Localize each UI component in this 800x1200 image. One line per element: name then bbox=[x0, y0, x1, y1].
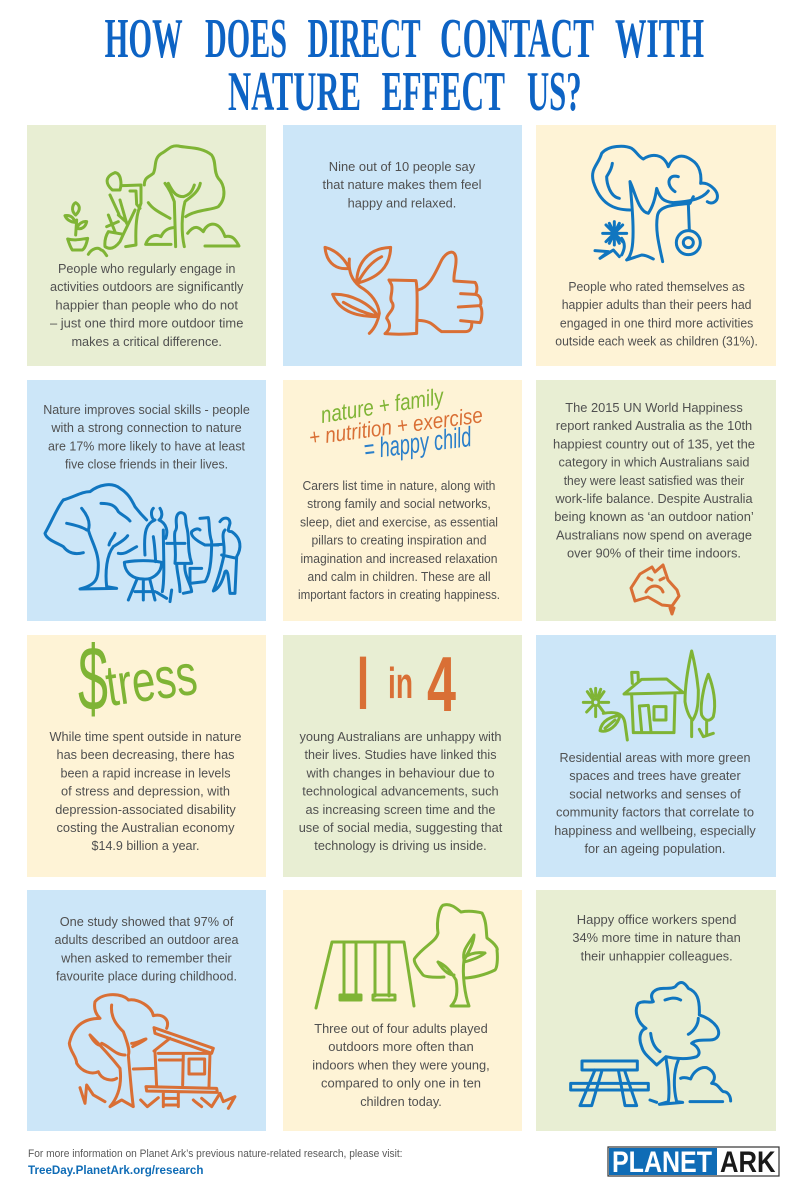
text block: Nature improves social skills - people bbox=[43, 402, 250, 417]
text block: happiest country out of 135, yet the bbox=[553, 436, 755, 451]
text block: One study showed that 97% of bbox=[60, 914, 234, 929]
text block: The 2015 UN World Happiness bbox=[565, 400, 743, 415]
text block: work-life balance. Despite Australia bbox=[555, 491, 753, 506]
text block: People who rated themselves as bbox=[568, 279, 745, 294]
text block: happy and relaxed. bbox=[348, 195, 456, 210]
text block: adults described an outdoor area bbox=[54, 932, 239, 947]
panel: favourite place bbox=[27, 890, 266, 1131]
text block: been a rapid increase in levels bbox=[60, 765, 231, 780]
text block: happiness and wellbeing, especially bbox=[554, 823, 756, 838]
text block: outdoors more often than bbox=[328, 1039, 474, 1054]
handwritten equation: = happy child bbox=[362, 421, 474, 465]
handwritten equation: nature + family bbox=[319, 383, 446, 428]
text block: Nine out of 10 people say bbox=[329, 159, 476, 174]
panel: stress bbox=[27, 628, 266, 877]
text block: imagination and increased relaxation bbox=[300, 551, 498, 566]
text block bbox=[50, 729, 242, 853]
text block: technology is driving us inside. bbox=[314, 838, 487, 853]
icon: gardener and tree bbox=[65, 146, 239, 256]
logo: Planet Ark: PLANET bbox=[612, 1146, 712, 1179]
text block: compared to only one in ten bbox=[321, 1076, 481, 1091]
text block: technological advancements, such bbox=[302, 784, 499, 799]
text block: has been decreasing, there has bbox=[56, 747, 235, 762]
icon: swing set and tree bbox=[316, 905, 497, 1008]
text block bbox=[554, 750, 756, 856]
panel: carers list bbox=[283, 380, 522, 621]
text block: community factors that correlate to bbox=[556, 805, 754, 820]
text block: as increasing screen time and the bbox=[306, 802, 496, 817]
panel: residential areas bbox=[536, 635, 776, 877]
text block: engaged in one third more activities bbox=[560, 315, 754, 330]
text block: $14.9 billion a year. bbox=[92, 838, 200, 853]
text block: when asked to remember their bbox=[60, 950, 232, 965]
text block bbox=[553, 400, 755, 561]
title: HOW bbox=[105, 8, 183, 70]
text block: and calm in children. These are all bbox=[308, 569, 491, 584]
text block: Carers list time in nature, along with bbox=[303, 478, 495, 493]
text block: People who regularly engage in bbox=[58, 261, 235, 276]
panel: happy and relaxed bbox=[283, 125, 522, 366]
title: NATURE bbox=[228, 61, 361, 123]
text block: their unhappier colleagues. bbox=[581, 948, 733, 963]
text block: of stress and depression, with bbox=[61, 784, 230, 799]
text block: favourite place during childhood. bbox=[56, 969, 237, 984]
panel: happier adults bbox=[536, 125, 776, 366]
title: DIRECT bbox=[308, 8, 421, 70]
text block: makes a critical difference. bbox=[71, 334, 222, 349]
heading: 1 in 4: I bbox=[357, 641, 369, 726]
panel: outdoor activities bbox=[27, 125, 266, 366]
icon: tree house bbox=[69, 995, 235, 1108]
text block bbox=[572, 912, 741, 963]
panel: social skills bbox=[27, 380, 266, 621]
logo: Planet Ark: ARK bbox=[720, 1146, 776, 1179]
text block: strong family and social networks, bbox=[307, 496, 491, 511]
panel: played outdoors bbox=[283, 890, 522, 1131]
title: WITH bbox=[615, 8, 704, 70]
title bbox=[105, 8, 704, 123]
text block: Three out of four adults played bbox=[314, 1021, 488, 1036]
panel: world happiness report bbox=[536, 380, 776, 621]
icon: barbecue with friends under tree bbox=[45, 485, 240, 602]
handwritten equation bbox=[307, 383, 484, 465]
text block: with changes in behaviour due to bbox=[306, 765, 494, 780]
text block: While time spent outside in nature bbox=[50, 729, 242, 744]
text block: that nature makes them feel bbox=[322, 177, 482, 192]
text block: depression-associated disability bbox=[55, 802, 236, 817]
text block bbox=[298, 478, 500, 602]
text block bbox=[312, 1021, 490, 1109]
title: CONTACT bbox=[440, 8, 594, 70]
text block: important factors in creating happiness. bbox=[298, 587, 500, 602]
text block: over 90% of their time indoors. bbox=[567, 546, 741, 561]
text block: – just one third more outdoor time bbox=[50, 316, 243, 331]
heading: $tress bbox=[78, 628, 201, 730]
icon: plant and thumbs up bbox=[325, 247, 482, 334]
text block bbox=[54, 914, 239, 984]
text block bbox=[50, 261, 244, 349]
heading: 1 in 4: in bbox=[388, 659, 413, 708]
footer link: TreeDay.PlanetArk.org/research bbox=[28, 1165, 204, 1177]
text block: with a strong connection to nature bbox=[50, 420, 242, 435]
text block: children today. bbox=[360, 1094, 442, 1109]
text block: Residential areas with more green bbox=[560, 750, 750, 765]
handwritten equation: + nutrition + exercise bbox=[307, 402, 484, 450]
text block: outside each week as children (31%). bbox=[555, 334, 758, 349]
text block bbox=[322, 159, 482, 210]
heading: $tress: tress bbox=[102, 642, 201, 719]
icon: tree with tyre swing bbox=[593, 146, 717, 262]
panel: 1 in 4 bbox=[283, 635, 522, 877]
text block: five close friends in their lives. bbox=[65, 457, 228, 472]
text block: activities outdoors are significantly bbox=[50, 279, 244, 294]
text block: for an ageing population. bbox=[584, 841, 726, 856]
text block bbox=[299, 729, 503, 853]
text block: pillars to creating inspiration and bbox=[312, 533, 486, 548]
text block: young Australians are unhappy with bbox=[300, 729, 502, 744]
text block: are 17% more likely to have at least bbox=[48, 438, 245, 453]
heading: 1 in 4: 4 bbox=[427, 640, 456, 728]
text block: social networks and senses of bbox=[569, 786, 741, 801]
text block: happier adults than their peers had bbox=[562, 297, 751, 312]
text block: category in which Australians said bbox=[558, 455, 750, 470]
text block: use of social media, suggesting that bbox=[299, 820, 503, 835]
text block: indoors when they were young, bbox=[312, 1057, 490, 1072]
title: DOES bbox=[205, 8, 287, 70]
text block: 34% more time in nature than bbox=[572, 930, 741, 945]
panel: office workers bbox=[536, 890, 776, 1131]
icon: picnic table and tree bbox=[571, 983, 731, 1106]
text block: Happy office workers spend bbox=[577, 912, 736, 927]
icon: sad Australia bbox=[631, 565, 679, 614]
text block bbox=[555, 279, 758, 349]
text block: being known as ‘an outdoor nation’ bbox=[554, 509, 754, 524]
text block: happier than people who do not bbox=[55, 297, 238, 312]
text block: Australians now spend on average bbox=[556, 527, 752, 542]
text block: they were least satisfied was their bbox=[564, 473, 745, 488]
text block: spaces and trees have greater bbox=[569, 768, 741, 783]
text block: report ranked Australia as the 10th bbox=[556, 418, 752, 433]
footer text: For more information on Planet Ark’s previous nature-related research, please visit: bbox=[28, 1148, 402, 1160]
heading: $tress: $ bbox=[78, 628, 108, 730]
text block bbox=[43, 402, 250, 472]
title: EFFECT bbox=[382, 61, 505, 123]
text block: their lives. Studies have linked this bbox=[304, 747, 497, 762]
heading: 1 in 4 bbox=[357, 640, 456, 728]
icon: house, flower and trees bbox=[583, 651, 715, 740]
text block: sleep, diet and exercise, as essential bbox=[300, 514, 498, 529]
title: US? bbox=[527, 61, 582, 123]
footer text bbox=[28, 1148, 402, 1177]
text block: costing the Australian economy bbox=[56, 820, 235, 835]
